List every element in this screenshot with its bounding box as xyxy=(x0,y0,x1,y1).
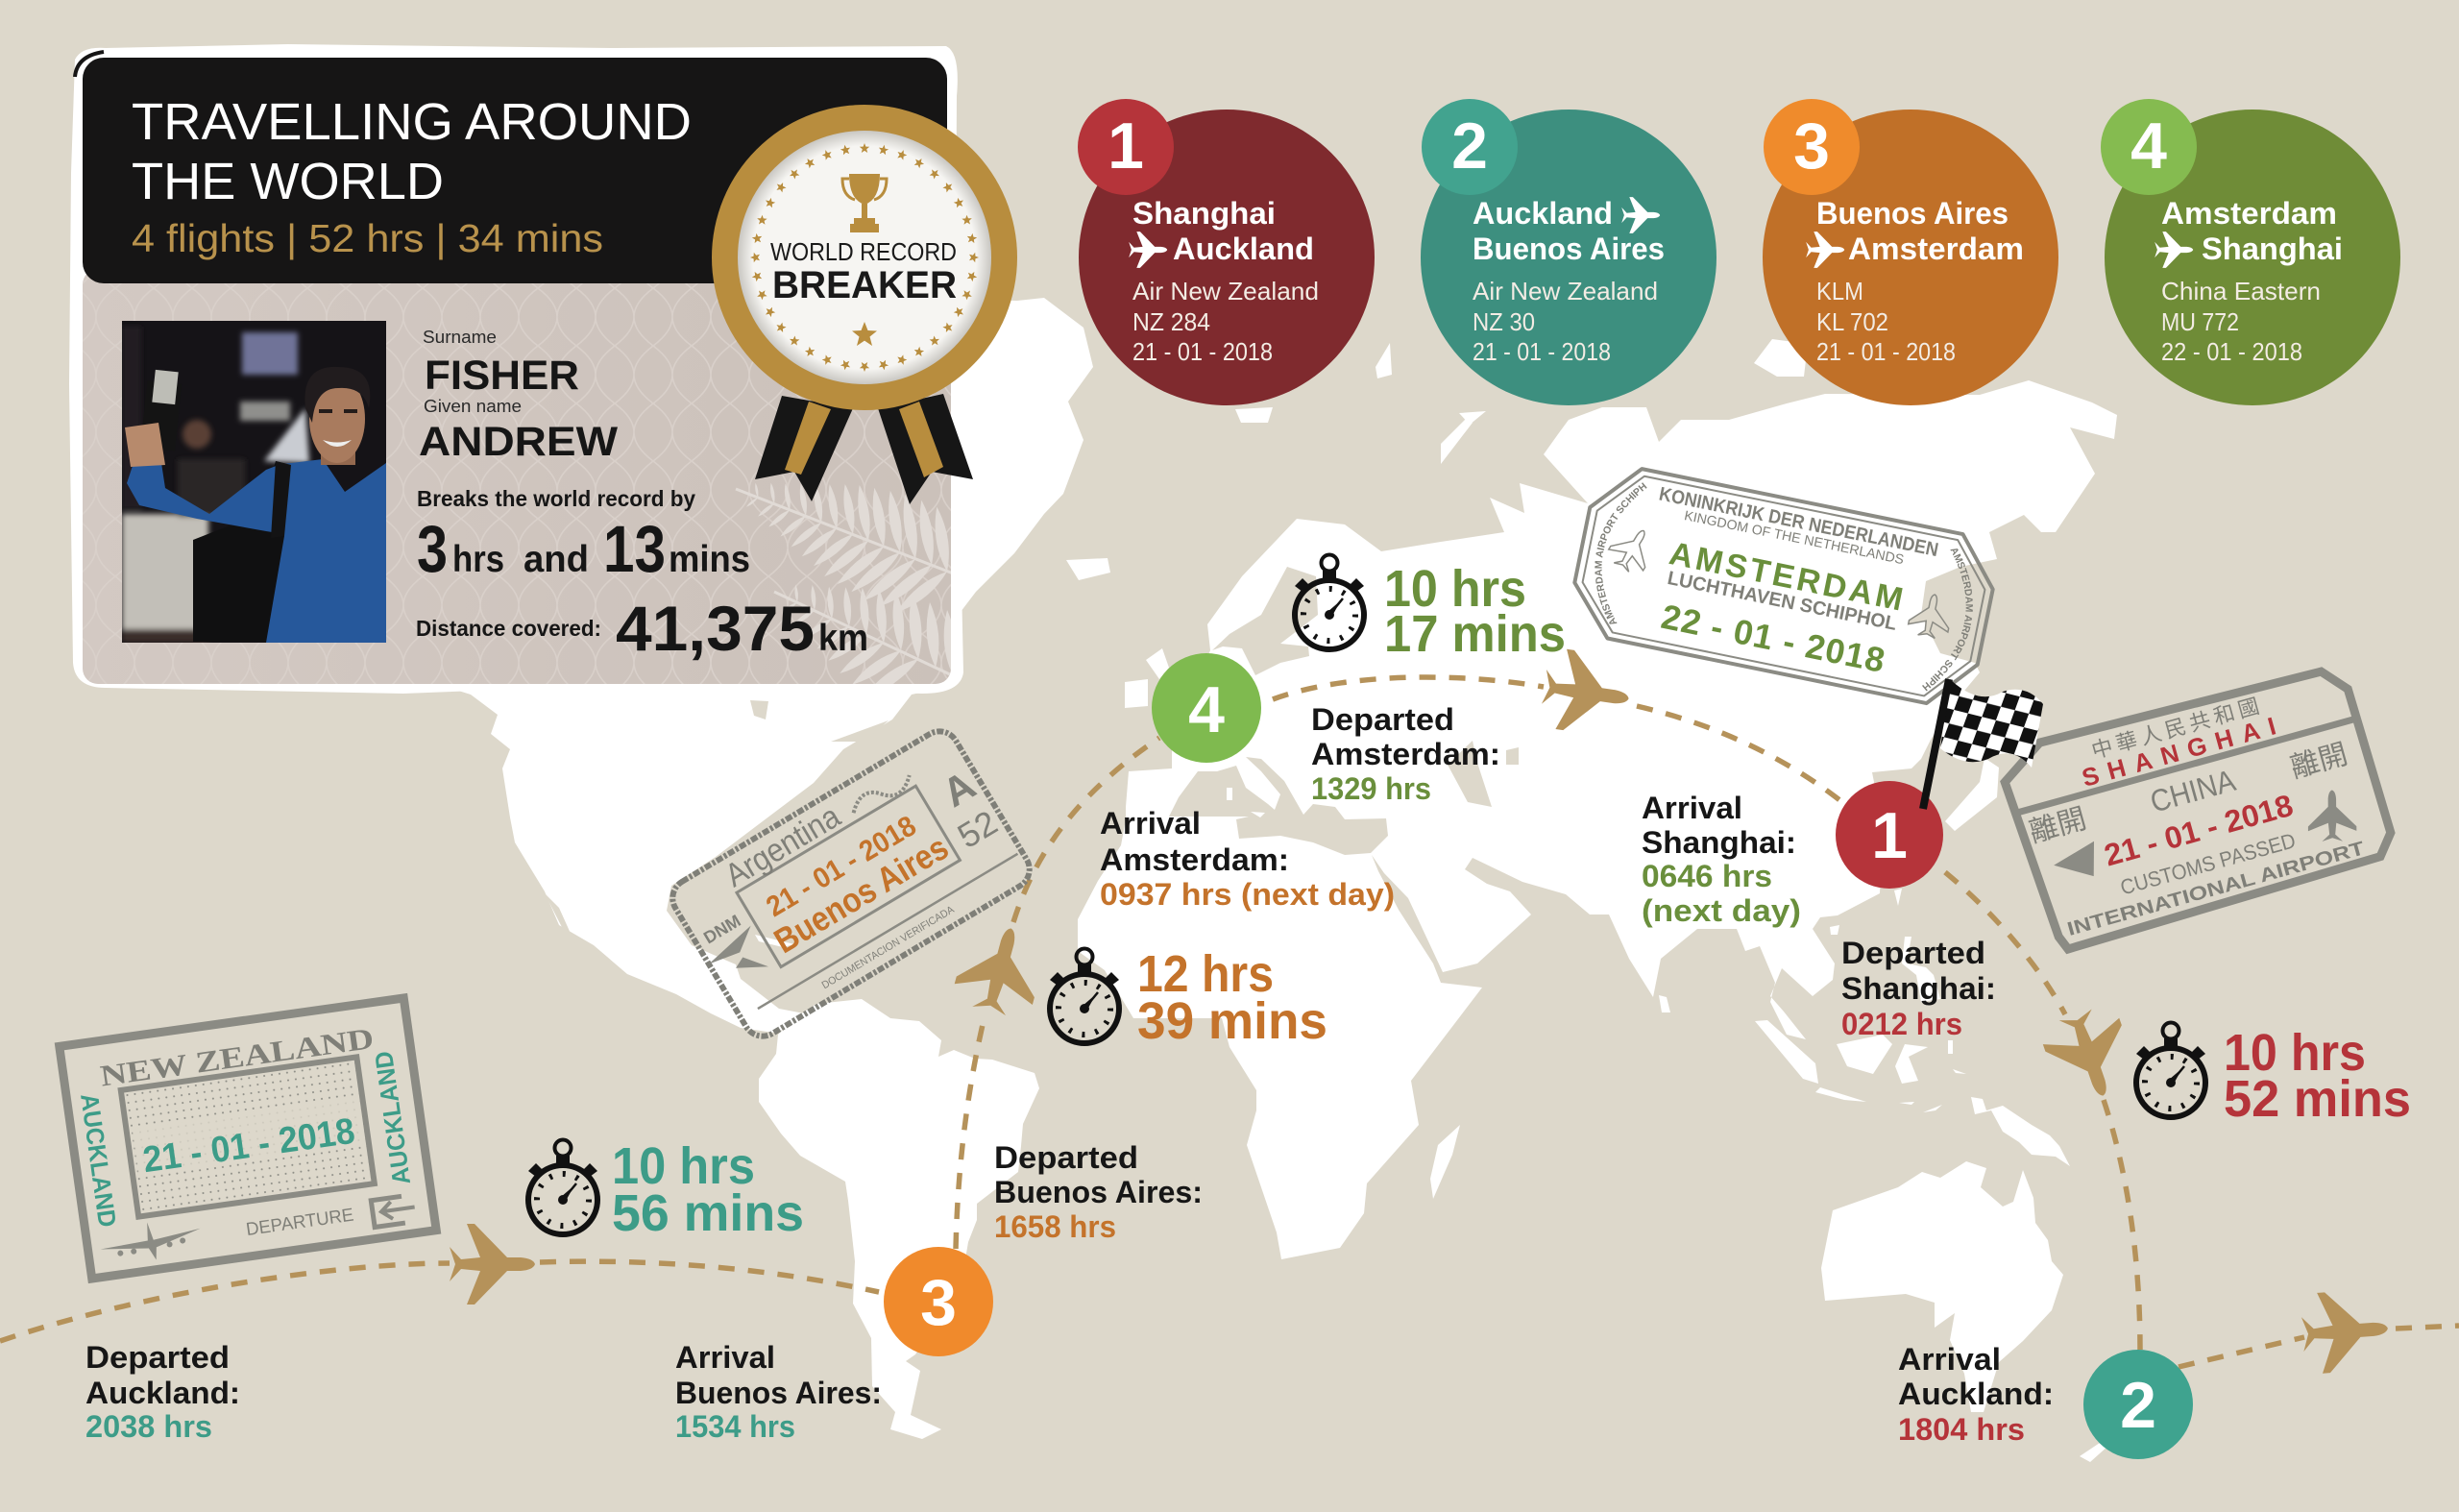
flight card 4: Amsterdam to Shanghai: MU 772 xyxy=(2161,307,2239,336)
number badge xyxy=(1764,99,1860,195)
flight card 2: Auckland to Buenos Aires: 21 - 01 - 2018 xyxy=(1473,337,1611,366)
label: arrival Amsterdam: Arrival xyxy=(1100,806,1201,841)
map: South America xyxy=(759,999,1039,1439)
label: departed Auckland: Departed xyxy=(85,1340,230,1375)
label: departed Amsterdam xyxy=(1311,702,1500,806)
flight card 2: Auckland to Buenos Aires: Buenos Aires xyxy=(1473,232,1665,266)
stamp: Amsterdam: LUCHTHAVEN SCHIPHOL xyxy=(1666,568,1899,635)
label: arrival Amsterdam xyxy=(1100,806,1395,912)
stamp: Buenos Aires: DOCUMENTACION VERIFICADA xyxy=(820,904,957,991)
record margin: hrs xyxy=(452,539,504,580)
map marker 1 xyxy=(1836,781,1943,889)
duration: 10 hrs 56 mins xyxy=(528,1137,804,1242)
label: departed Buenos Aires: 1658 hrs xyxy=(994,1209,1116,1244)
distance covered: Distance covered: xyxy=(416,616,601,641)
label: departed Auckland: Auckland: xyxy=(85,1376,240,1410)
number badge xyxy=(1422,99,1518,195)
label: arrival Auckland: Auckland: xyxy=(1898,1377,2054,1411)
medal: world record breaker xyxy=(712,105,1017,504)
distance covered xyxy=(416,593,868,664)
flight card 3: Buenos Aires to Amsterdam: Amsterdam xyxy=(1848,232,2024,266)
icon: plane xyxy=(1621,197,1660,233)
record margin: and xyxy=(523,539,589,580)
label: arrival Buenos Aires: Buenos Aires: xyxy=(675,1376,882,1410)
flight card 2: Auckland to Buenos Aires: Air New Zealand xyxy=(1473,277,1658,305)
record margin: mins xyxy=(669,539,750,580)
stamp: Shanghai: CUSTOMS PASSED xyxy=(2118,828,2299,900)
icon: plane Buenos Aires to Amsterdam xyxy=(950,918,1050,1021)
icon: stopwatch xyxy=(1295,555,1364,649)
label: departed Shanghai: Departed xyxy=(1841,936,1985,970)
label: departed Amsterdam: Amsterdam: xyxy=(1311,737,1500,771)
label: departed Buenos Aires: Departed xyxy=(994,1140,1138,1175)
stamp: Amsterdam: AMSTERDAM AIRPORT SCHIPHOL xyxy=(1922,549,1973,692)
flight card 1: Shanghai to Auckland: Shanghai xyxy=(1132,196,1276,231)
medal disc xyxy=(712,105,1017,410)
stamp: Shanghai: 離開 xyxy=(2287,739,2351,784)
number badge xyxy=(1078,99,1174,195)
stamp: Buenos Aires: DNM xyxy=(700,911,744,947)
map: inland seas xyxy=(545,567,1519,946)
icon: stopwatch xyxy=(528,1139,597,1234)
stamp: New Zealand: NEW ZEALAND xyxy=(98,1021,376,1093)
flight card 2: Auckland to Buenos Aires: NZ 30 xyxy=(1473,307,1535,336)
map marker 2 xyxy=(2083,1350,2193,1459)
subtitle: 4 flights | 52 hrs | 34 mins xyxy=(132,216,603,260)
label: departed Auckland: 2038 hrs xyxy=(85,1409,212,1444)
title: THE WORLD xyxy=(132,153,444,210)
label: arrival Buenos Aires: Arrival xyxy=(675,1340,775,1375)
duration: 10 hrs 52 mins: 52 mins xyxy=(2224,1070,2411,1128)
flight card 4: Amsterdam to Shanghai: China Eastern xyxy=(2161,277,2321,305)
stamp: Buenos Aires: Buenos Aires xyxy=(767,827,955,961)
stamp: Shanghai: INTERNATIONAL AIRPORT xyxy=(2065,838,2367,940)
record margin: Breaks the world record by xyxy=(417,486,695,511)
panel white torn border xyxy=(69,44,963,694)
icon: plane xyxy=(1129,232,1167,268)
icon: stopwatch xyxy=(1050,949,1119,1043)
stamp: New Zealand: AUCKLAND xyxy=(369,1049,416,1186)
map: Eurasia and Africa xyxy=(1078,380,2117,1259)
blue sweater torso xyxy=(266,459,386,643)
map marker 4 xyxy=(1152,653,1261,763)
flight card 4: Amsterdam to Shanghai xyxy=(2101,99,2400,405)
label: arrival Shanghai: 0646 hrs xyxy=(1642,859,1772,893)
stamp: Amsterdam: AMSTERDAM AIRPORT SCHIPHOL xyxy=(1595,482,1647,624)
flight card 1: Shanghai to Auckland: 21 - 01 - 2018 xyxy=(1132,337,1273,366)
number badge xyxy=(2101,99,2197,195)
icon: plane Shanghai to Auckland xyxy=(2037,1002,2141,1109)
name: surname xyxy=(423,328,579,399)
number badge: 4 xyxy=(2130,110,2167,183)
flight card 1: Shanghai to Auckland: NZ 284 xyxy=(1132,307,1210,336)
world map xyxy=(96,288,2117,1462)
name: surname: Surname xyxy=(423,328,497,347)
duration: 10 hrs 52 mins xyxy=(2136,1022,2411,1128)
duration: 12 hrs 39 mins xyxy=(1050,945,1327,1050)
record margin xyxy=(417,486,750,586)
flight card 4: Amsterdam to Shanghai: 22 - 01 - 2018 xyxy=(2161,337,2302,366)
flight card 1: Shanghai to Auckland xyxy=(1078,99,1375,405)
hand xyxy=(125,423,165,467)
label: arrival Amsterdam: Amsterdam: xyxy=(1100,842,1289,877)
number badge: 1 xyxy=(1108,110,1144,183)
duration: 12 hrs 39 mins: 12 hrs xyxy=(1137,945,1274,1003)
stamp: Amsterdam: KINGDOM OF THE NETHERLANDS xyxy=(1683,507,1906,567)
stamp: Buenos Aires: 52 xyxy=(951,802,1004,856)
label: departed Shanghai: 0212 hrs xyxy=(1841,1007,1962,1041)
record margin: 3 xyxy=(417,512,448,586)
stamp: Buenos Aires: Argentina xyxy=(719,798,846,894)
stamp: Amsterdam: AMSTERDAM xyxy=(1667,535,1906,619)
icon: trophy xyxy=(842,174,887,232)
duration: 10 hrs 56 mins: 56 mins xyxy=(612,1184,804,1242)
label: arrival Auckland: 1804 hrs xyxy=(1898,1412,2025,1447)
stamp: Amsterdam: 22 - 01 - 2018 xyxy=(1658,597,1888,680)
name: given name xyxy=(419,397,618,465)
label: departed Shanghai xyxy=(1841,936,1996,1041)
stamp: Shanghai: 21 - 01 - 2018 xyxy=(2101,788,2297,873)
label: departed Buenos Aires: Buenos Aires: xyxy=(994,1175,1203,1209)
stamp: New Zealand: AUCKLAND xyxy=(75,1091,122,1229)
icon: star xyxy=(852,322,877,346)
icon: plane Amsterdam to Shanghai xyxy=(1539,646,1634,739)
raised arm xyxy=(127,465,276,532)
distance covered: km xyxy=(818,618,868,659)
name: given name: ANDREW xyxy=(419,419,618,465)
stamp: New Zealand: 21 - 01 - 2018 xyxy=(140,1111,357,1181)
stamp: Shanghai xyxy=(1997,659,2398,954)
photo: traveller holding passport xyxy=(122,321,386,643)
label: arrival Buenos Aires xyxy=(675,1340,882,1444)
map: Australia xyxy=(1821,1161,2063,1412)
record margin: 13 xyxy=(603,512,666,586)
label: arrival Shanghai xyxy=(1642,791,1801,928)
flight card 1: Shanghai to Auckland: Air New Zealand xyxy=(1132,277,1319,305)
flight card 3: Buenos Aires to Amsterdam: KL 702 xyxy=(1816,307,1888,336)
label: arrival Amsterdam: 0937 hrs (next day) xyxy=(1100,877,1395,912)
map marker 3: 3 xyxy=(920,1266,957,1339)
flight card 4: Amsterdam to Shanghai: Amsterdam xyxy=(2161,196,2337,231)
flight route: dashed path xyxy=(0,677,2459,1367)
icon: chequered finish flag xyxy=(1923,679,2043,809)
label: arrival Auckland: Arrival xyxy=(1898,1342,2001,1377)
number badge: 3 xyxy=(1793,110,1830,183)
backpack xyxy=(193,461,291,642)
flight card 3: Buenos Aires to Amsterdam: 21 - 01 - 2018 xyxy=(1816,337,1956,366)
label: departed Auckland xyxy=(85,1340,240,1444)
label: departed Buenos Aires xyxy=(994,1140,1203,1244)
stamp: Shanghai: SHANGHAI xyxy=(2079,711,2279,793)
stamp: Buenos Aires: 21 - 01 - 2018 xyxy=(761,810,922,923)
star ring xyxy=(750,143,979,372)
medal text: WORLD RECORD xyxy=(770,237,957,266)
icon: stopwatch xyxy=(2136,1022,2205,1117)
flight card 4: Amsterdam to Shanghai: Shanghai xyxy=(2202,232,2343,266)
icon: plane Auckland to Buenos Aires xyxy=(450,1224,535,1305)
head xyxy=(321,451,355,465)
duration: 10 hrs 17 mins: 17 mins xyxy=(1384,605,1566,663)
distance covered: 41,375 xyxy=(616,593,815,664)
label: departed Amsterdam: Departed xyxy=(1311,702,1454,737)
label: arrival Shanghai: Shanghai: xyxy=(1642,825,1796,860)
flight card 3: Buenos Aires to Amsterdam: Buenos Aires xyxy=(1816,196,2009,231)
stamp: Buenos Aires xyxy=(666,724,1036,1043)
stamp: Buenos Aires: A xyxy=(935,762,983,816)
label: arrival Shanghai: Arrival xyxy=(1642,791,1742,825)
stamp: Shanghai: 中華人民共和國 xyxy=(2089,694,2262,763)
title: TRAVELLING AROUND xyxy=(132,93,692,151)
stamp: New Zealand xyxy=(60,998,436,1279)
label: arrival Shanghai: (next day) xyxy=(1642,893,1801,928)
name: surname: FISHER xyxy=(425,353,579,399)
stamp: Amsterdam xyxy=(1572,467,1995,705)
panel: record holder card xyxy=(69,44,970,701)
flight card 1: Shanghai to Auckland: Auckland xyxy=(1173,232,1314,266)
icon: plane leaving Auckland xyxy=(2300,1288,2391,1375)
passport and boarding pass xyxy=(140,380,182,451)
map marker 3 xyxy=(884,1247,993,1356)
header bar xyxy=(83,58,947,283)
medal: world record breaker: BREAKER xyxy=(772,264,957,306)
panel tan background xyxy=(83,269,970,701)
name: given name: Given name xyxy=(424,397,522,416)
label: arrival Auckland xyxy=(1898,1342,2054,1447)
icon: plane xyxy=(2155,232,2193,268)
flight card 3: Buenos Aires to Amsterdam xyxy=(1763,99,2058,405)
flight card 3: Buenos Aires to Amsterdam: KLM xyxy=(1816,277,1863,305)
label: arrival Buenos Aires: 1534 hrs xyxy=(675,1409,795,1444)
title xyxy=(132,93,692,210)
map marker 1: 1 xyxy=(1871,799,1908,872)
flight card 2: Auckland to Buenos Aires xyxy=(1421,99,1716,405)
ribbons xyxy=(755,396,853,501)
stamp: New Zealand: DEPARTURE xyxy=(245,1206,355,1240)
duration: 12 hrs 39 mins: 39 mins xyxy=(1137,992,1327,1050)
stamp: Shanghai: CHINA xyxy=(2147,763,2239,819)
duration: 10 hrs 52 mins: 10 hrs xyxy=(2224,1024,2366,1082)
stamp: Shanghai: 離開 xyxy=(2026,803,2090,849)
label: departed Amsterdam: 1329 hrs xyxy=(1311,771,1431,806)
duration: 10 hrs 56 mins: 10 hrs xyxy=(612,1137,755,1195)
icon: plane xyxy=(1806,232,1844,268)
stamp: Amsterdam: KONINKRIJK DER NEDERLANDEN xyxy=(1657,483,1940,561)
label: departed Shanghai: Shanghai: xyxy=(1841,971,1996,1006)
duration: 10 hrs 17 mins xyxy=(1295,555,1566,663)
map marker 2: 2 xyxy=(2120,1369,2156,1442)
map: North America xyxy=(96,288,1093,1033)
map: islands xyxy=(755,339,2108,1462)
duration: 10 hrs 17 mins: 10 hrs xyxy=(1384,560,1526,618)
map marker 4: 4 xyxy=(1188,673,1225,746)
flight card 2: Auckland to Buenos Aires: Auckland xyxy=(1473,196,1613,231)
number badge: 2 xyxy=(1451,110,1488,183)
